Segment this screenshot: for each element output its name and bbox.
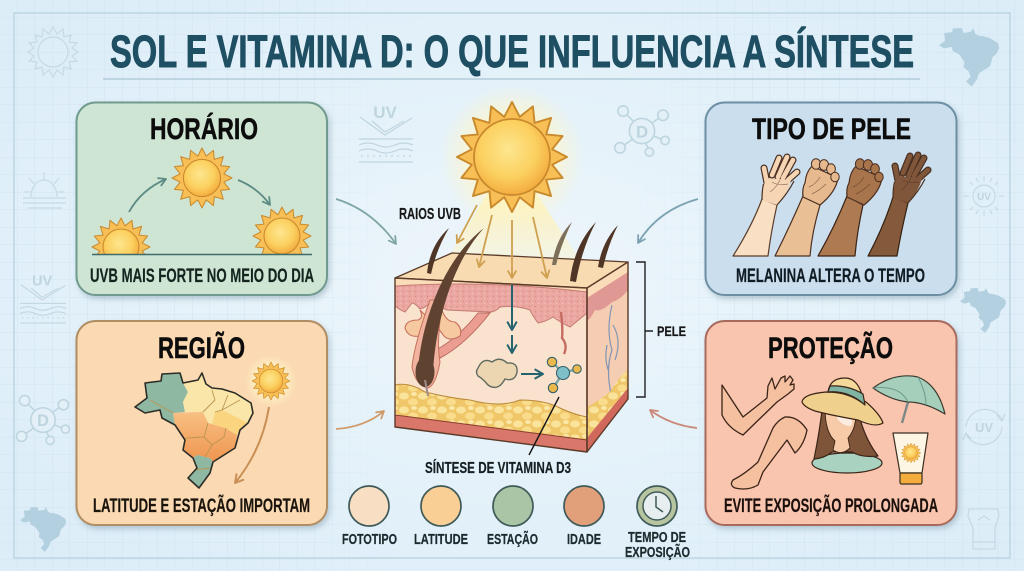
caption: horário: UVB MAIS FORTE NO MEIO DO DIA (90, 266, 314, 287)
legend (342, 486, 690, 561)
arrow: setting (238, 180, 270, 205)
panel: proteção (706, 321, 956, 525)
icon: large sun (440, 85, 584, 229)
hair: right three (598, 225, 618, 268)
icon: sunscreen tube (893, 433, 928, 484)
icon: woman with hat (802, 378, 883, 473)
icon: arm tan fist (775, 159, 839, 256)
icon: low sun right (252, 206, 312, 254)
icon: arm (722, 376, 794, 435)
icon: faded vitamin D molecule left (16, 396, 70, 444)
icon: leg (731, 417, 807, 489)
icon: faded Brazil bottom left (20, 507, 66, 552)
legend: idade: IDADE (567, 532, 601, 548)
teal penetration arrows (512, 285, 543, 374)
legend: fototipo: FOTOTIPO (342, 532, 397, 548)
icon: faded UV cycle right (963, 409, 1005, 445)
icon: faded vitamin D molecule center (615, 106, 669, 156)
sebaceous gland (405, 310, 461, 339)
front face layers (396, 278, 586, 452)
light beam (440, 190, 590, 275)
icon: faded sunscreen right (968, 509, 999, 549)
legend: tempo de exposição (625, 486, 690, 561)
map: Brazil regions (135, 373, 253, 488)
hair: large with follicle (416, 228, 484, 396)
hair: right one (552, 222, 572, 265)
icon: faded sunset left (23, 172, 66, 208)
duct (561, 312, 566, 354)
legend: tempo de exposição: EXPOSIÇÃO (625, 543, 690, 561)
panel: tipo de pele (706, 102, 956, 295)
label: pele: PELE (657, 323, 686, 339)
heading: região: REGIÃO (158, 331, 245, 365)
icon: faded UV sun right (964, 176, 1004, 216)
hair: small left (427, 228, 449, 274)
follicle sheath (412, 300, 443, 388)
icon: noon sun (172, 148, 232, 208)
precursor blob (476, 359, 517, 387)
caption: região: LATITUDE E ESTAÇÃO IMPORTAM (93, 495, 310, 517)
panel: região (76, 321, 327, 525)
arrow: sun to south (235, 407, 269, 483)
hair: right two (570, 222, 596, 282)
skin diagram (395, 205, 653, 460)
icon: faded uv waves left (20, 274, 66, 323)
horizon line (92, 254, 312, 256)
icon: faded Brazil right (960, 288, 1006, 333)
uvb arrows (457, 205, 547, 278)
pointer line (529, 397, 559, 455)
arrow: proteção to skin (650, 410, 697, 428)
icon: umbrella (873, 376, 945, 423)
arrow: horário to skin (336, 199, 396, 244)
right face layers (588, 264, 628, 450)
label: raios uvb: RAIOS UVB (399, 206, 461, 223)
icon: faded UV sun right: UV (977, 192, 991, 203)
icon: faded Brazil top right (939, 28, 999, 87)
top face (395, 253, 628, 288)
icon: faded UV cycle right: UV (975, 420, 993, 435)
icon: low sun left (92, 218, 150, 254)
vitamin D3 molecule (547, 357, 581, 393)
caption: tipo de pele: MELANINA ALTERA O TEMPO (736, 266, 925, 287)
icon: faded uv waves center (359, 103, 413, 162)
legend: idade (564, 486, 604, 548)
heading: proteção: PROTEÇÃO (768, 331, 893, 365)
icon: faded sun top left (28, 27, 78, 77)
icon: arm dark open hand (868, 155, 928, 256)
legend: tempo de exposição: TEMPO DE (628, 530, 686, 546)
panel: horário (76, 102, 327, 295)
arrow: rising (129, 179, 166, 212)
arrow: tipo de pele to skin (638, 199, 698, 243)
legend: estação (487, 486, 538, 548)
heading: horário: HORÁRIO (150, 112, 258, 146)
arrow: região to skin (336, 411, 384, 429)
heading: tipo de pele: TIPO DE PELE (752, 113, 911, 146)
icon: sun region (245, 355, 297, 407)
legend: latitude: LATITUDE (414, 532, 468, 548)
icon: arm light open hand (733, 157, 797, 256)
label: síntese de vitamina d3: SÍNTESE DE VITAMINA D3 (425, 460, 571, 477)
bracket: pele (636, 262, 653, 397)
icon: arm brown fist (818, 159, 883, 256)
muscle (436, 313, 490, 358)
legend: fototipo (342, 486, 397, 548)
legend: latitude (414, 486, 468, 548)
legend: estação: ESTAÇÃO (487, 530, 538, 548)
